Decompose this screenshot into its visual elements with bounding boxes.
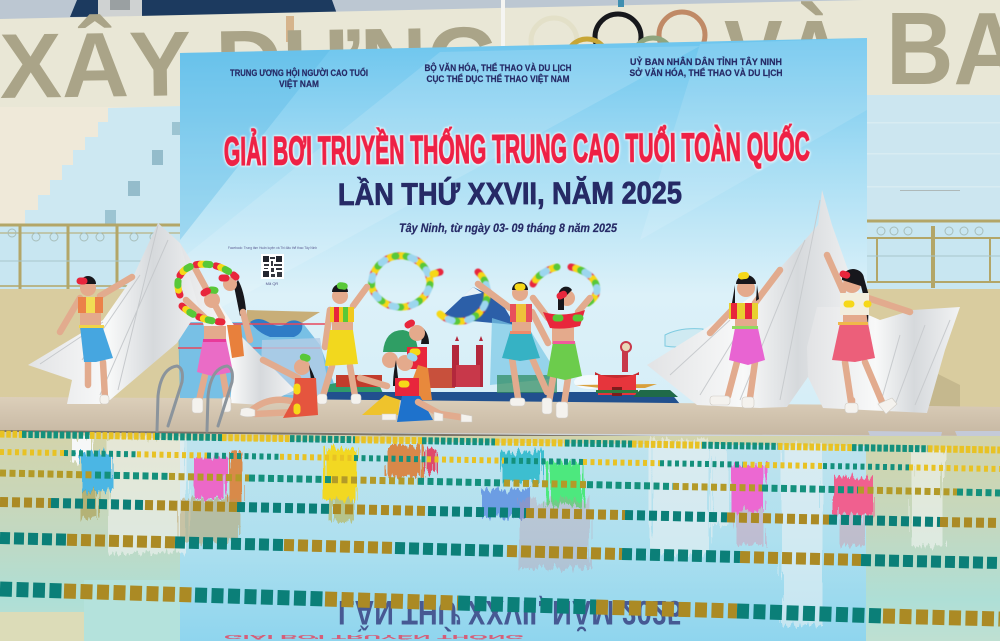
QR code xyxy=(261,254,284,279)
organiser text right: UỶ BAN NHÂN DÂN TỈNH TÂY NINH xyxy=(630,56,782,67)
facebook caption: Facebook: Trung tâm Huấn luyện và Thi đấu thể thao Tây Ninh xyxy=(228,246,317,250)
silver wing right inner xyxy=(807,307,960,413)
reflected title: GIẢI BƠI TRUYỀN THỐNG xyxy=(224,634,524,640)
organiser text centre xyxy=(424,62,572,84)
banner artwork: mountain xyxy=(440,287,560,393)
organiser text right: SỞ VĂN HÓA, THỂ THAO VÀ DU LỊCH xyxy=(630,67,782,78)
stadium roof xyxy=(70,0,337,17)
dancer 10: magenta skirt xyxy=(710,270,780,408)
dancer 4: yellow skirt xyxy=(317,284,367,404)
lane rope 3 xyxy=(0,473,1000,493)
railing left xyxy=(0,224,182,290)
silver wing left xyxy=(28,223,207,404)
dancer 1: blue skirt xyxy=(60,276,132,404)
bleachers right xyxy=(860,95,1000,225)
background: sky xyxy=(0,0,1000,60)
banner artwork: left coast xyxy=(178,310,340,401)
reflected subtitle: LẦN THỨ XXVII, NĂM 2025 xyxy=(338,594,682,632)
subtitle: LẦN THỨ XXVII, NĂM 2025 xyxy=(338,174,682,212)
water reflections xyxy=(70,437,944,625)
stadium wall with lettering: XÂY DỰNG xyxy=(0,8,500,118)
beige wall right xyxy=(860,289,1000,409)
lane rope 1 xyxy=(0,434,1000,450)
organiser text centre: CỤC THỂ DỤC THỂ THAO VIỆT NAM xyxy=(426,73,570,84)
dancer 6: kneeling with yellow skirt xyxy=(360,322,432,415)
dancer 8: teal skirt xyxy=(478,282,548,406)
silver wing centre xyxy=(180,243,295,405)
dancer 11: coral skirt xyxy=(827,255,910,414)
date line: Tây Ninh, từ ngày 03- 09 tháng 8 năm 2025 xyxy=(399,221,617,235)
organiser text right xyxy=(630,56,782,78)
pool ladders xyxy=(157,366,232,431)
railing right xyxy=(862,220,1000,290)
QR caption: Mã QR xyxy=(266,281,278,286)
lane rope 2 xyxy=(0,452,1000,469)
lane rope 4 xyxy=(0,502,1000,523)
banner artwork: monument xyxy=(574,329,703,397)
hoop garland 1 xyxy=(372,256,430,307)
dancer 9: green skirt xyxy=(533,287,590,418)
organiser text left: TRUNG ƯƠNG HỘI NGƯỜI CAO TUỔI xyxy=(230,67,368,78)
dancer 7: kneeling with blue skirt xyxy=(382,355,472,422)
lane rope 6 xyxy=(0,589,1000,619)
organiser text left: VIỆT NAM xyxy=(279,78,319,89)
silver wing right outer xyxy=(647,190,862,408)
olympic rings xyxy=(531,12,705,81)
beige wall left xyxy=(0,289,182,401)
dancer 5: seated with flower top xyxy=(240,357,318,418)
hoop garland 2 xyxy=(433,272,487,321)
pool water xyxy=(0,436,1000,641)
dancer 3: orange skirt behind xyxy=(222,277,250,358)
organiser text centre: BỘ VĂN HÓA, THỂ THAO VÀ DU LỊCH xyxy=(424,62,572,73)
bleachers left xyxy=(0,106,182,227)
dancer 2: pink skirt with garland xyxy=(178,264,236,413)
stadium wall with lettering: VÀ xyxy=(724,0,846,112)
lane rope 5 xyxy=(0,538,1000,563)
floor deck xyxy=(0,397,1000,446)
banner artwork: temple and trees xyxy=(326,330,680,404)
hoop garland 3 xyxy=(533,267,597,303)
organiser text left xyxy=(230,67,368,89)
stadium wall with lettering xyxy=(0,0,1000,118)
banner xyxy=(178,38,867,405)
